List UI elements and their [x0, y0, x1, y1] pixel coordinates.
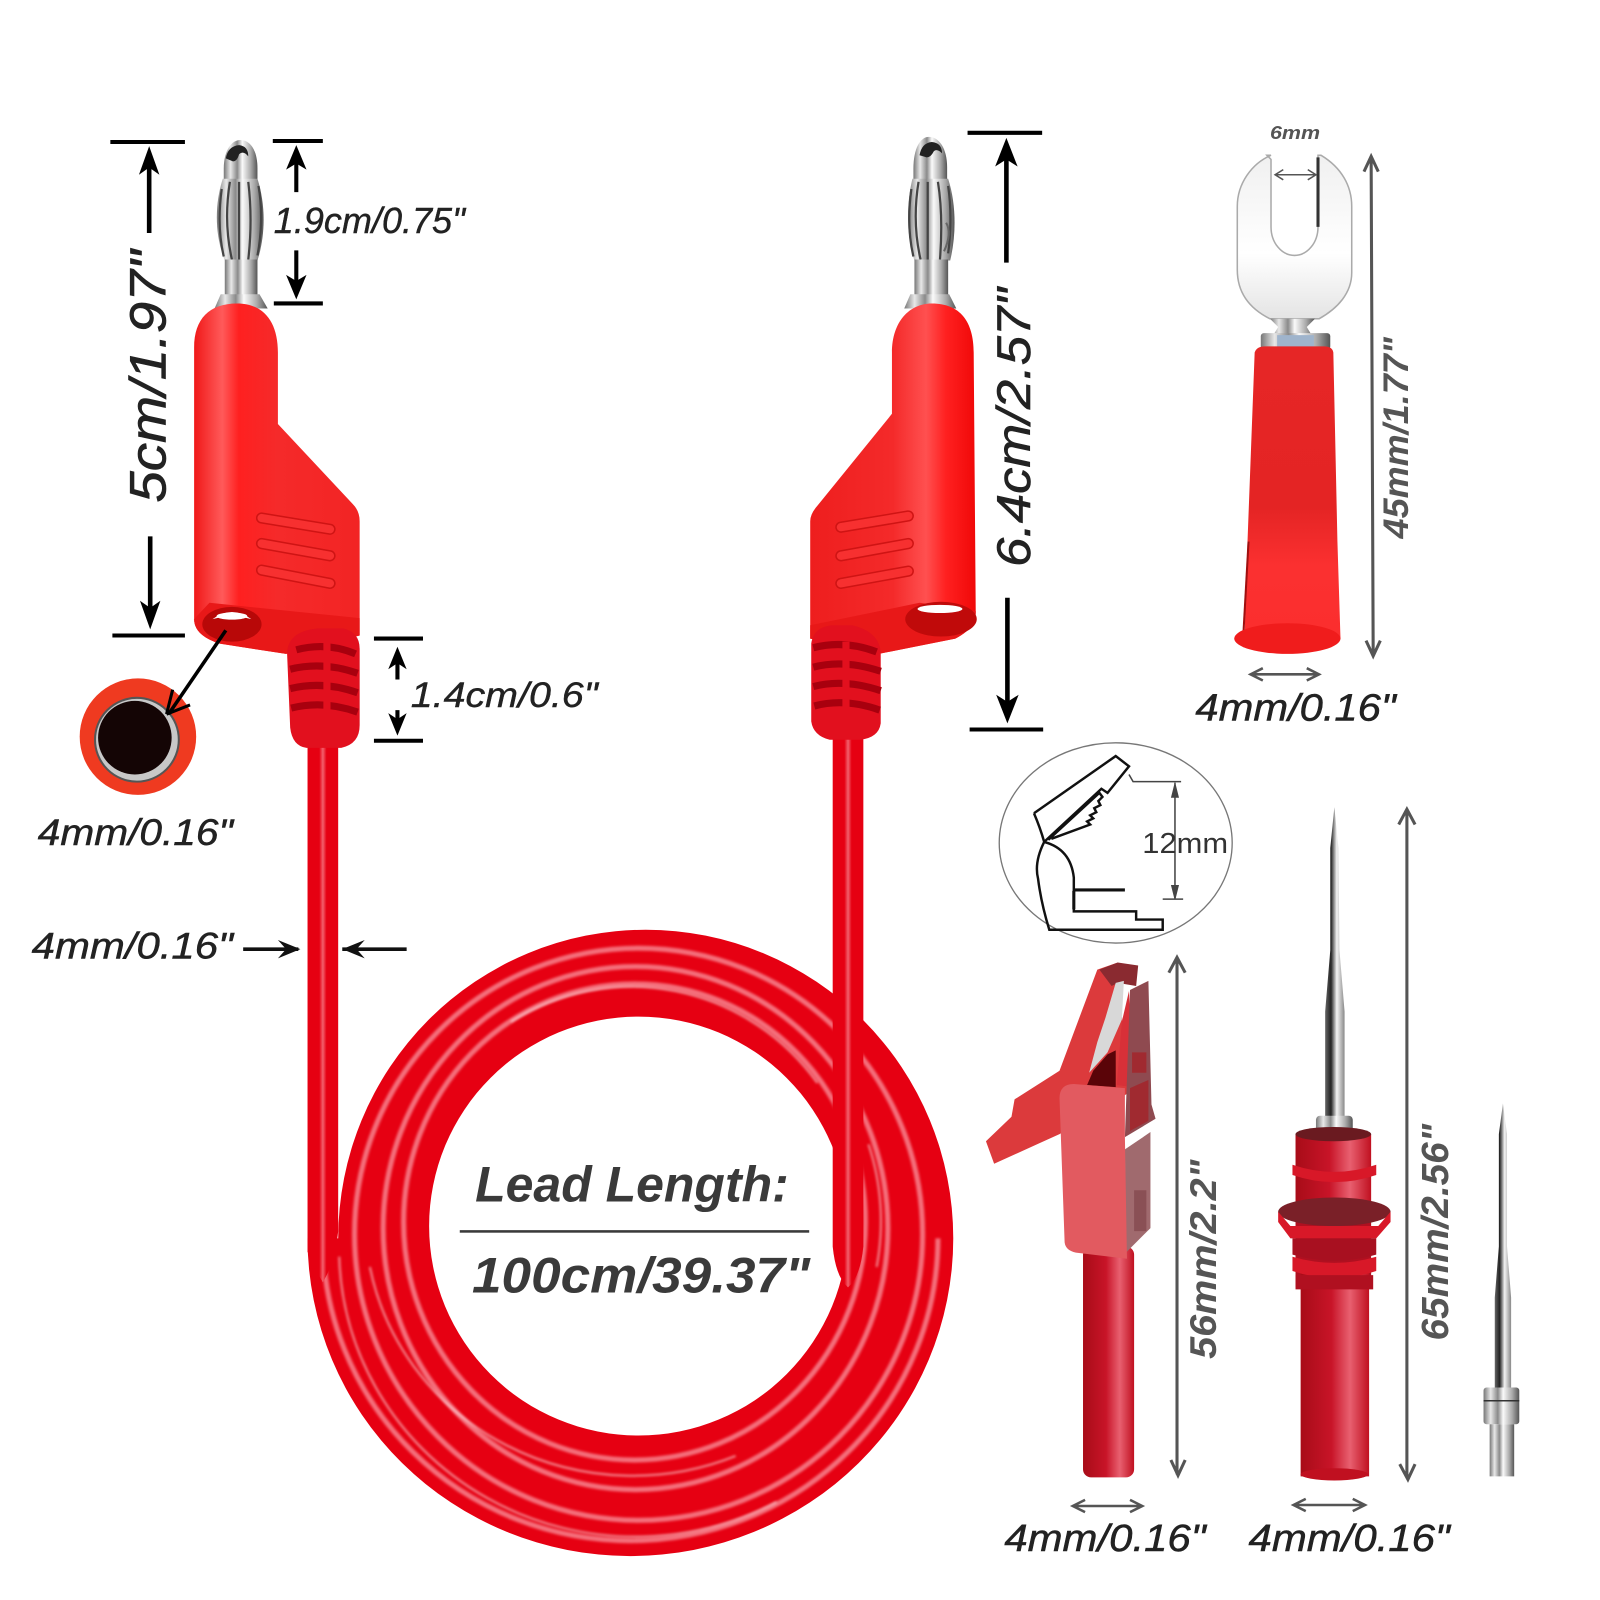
spade fork [1237, 155, 1352, 319]
right plug body [810, 303, 976, 654]
spare needle [1484, 1103, 1519, 1476]
jaw opening detail [999, 743, 1232, 943]
6mm gap arrow: 6mm [1270, 122, 1320, 143]
dimension: clip 56mm/2.2: 56mm/2.2" [1183, 1159, 1224, 1359]
right wire [833, 736, 863, 1287]
socket detail icon [80, 678, 196, 795]
dimension: wire 4mm/0.16: 4mm/0.16" [32, 925, 235, 966]
left plug body [194, 303, 360, 654]
clip stem [1083, 1246, 1134, 1477]
clip side panel [1125, 981, 1156, 1137]
left plug grip ridges [262, 518, 330, 583]
right plug grip ridges [841, 516, 908, 583]
jaw outline [1034, 756, 1163, 930]
dimension: 6.4cm/2.57: 6.4cm/2.57" [987, 286, 1040, 567]
dimension: clip 4mm/0.16: 4mm/0.16" [1004, 1518, 1207, 1560]
left banana plug [194, 140, 360, 748]
dimension: probe 65mm/2.56 [1399, 809, 1457, 1479]
dimension: wire 4mm/0.16 [32, 925, 407, 966]
left wire [308, 741, 338, 1282]
dimension: 45mm/1.77: 45mm/1.77" [1378, 337, 1416, 539]
clip front block [1060, 1084, 1127, 1259]
spade red sleeve [1244, 346, 1340, 639]
right banana plug [810, 137, 977, 740]
dimension: 5cm/1.97: 5cm/1.97" [120, 247, 177, 503]
piercing probe [1278, 807, 1391, 1480]
jaw opening detail: 12mm [1142, 828, 1228, 860]
left pin [215, 140, 268, 309]
spade terminal [1234, 155, 1352, 654]
right pin [904, 137, 956, 309]
lead length label [460, 1157, 812, 1303]
lead wire coil [308, 930, 953, 1556]
label: socket 4mm/0.16: 4mm/0.16" [38, 812, 235, 853]
dimension: 1.9cm/0.75 [273, 141, 467, 303]
dimension: spade 4mm/0.16: 4mm/0.16" [1195, 687, 1397, 729]
lead length label: 100cm/39.37" [472, 1247, 812, 1303]
dimension: probe 4mm/0.16: 4mm/0.16" [1249, 1518, 1452, 1560]
dimension: spade 4mm/0.16 [1195, 668, 1397, 729]
clip rear lever [986, 962, 1128, 1164]
dimension: probe 65mm/2.56: 65mm/2.56" [1415, 1123, 1457, 1340]
dimension: 6.4cm/2.57 [968, 133, 1043, 730]
arrow to socket detail [167, 630, 226, 714]
dimension: clip 56mm/2.2 [1169, 957, 1224, 1475]
left strain relief [287, 628, 360, 748]
dimension: 45mm/1.77 [1364, 156, 1416, 656]
dimension: clip 4mm/0.16 [1004, 1500, 1207, 1560]
dimension: 1.9cm/0.75: 1.9cm/0.75" [274, 201, 467, 241]
dimension: 1.4cm/0.6 [374, 639, 600, 741]
dimension: probe 4mm/0.16 [1249, 1499, 1452, 1560]
6mm gap arrow [1270, 122, 1320, 180]
left plug socket [202, 607, 262, 642]
dimension: 1.4cm/0.6: 1.4cm/0.6" [411, 677, 600, 715]
12mm height marker [1129, 774, 1183, 899]
probe collar [1316, 1116, 1353, 1134]
right strain relief [811, 625, 881, 740]
probe needle [1325, 807, 1345, 1119]
spade collar [1270, 319, 1315, 337]
right plug socket [905, 602, 977, 637]
lead length label: Lead Length: [475, 1157, 789, 1213]
clip teeth [1089, 981, 1124, 1073]
dimension: 5cm/1.97 [110, 142, 185, 636]
probe flange [1278, 1197, 1391, 1226]
probe red body [1296, 1206, 1371, 1287]
alligator clip [986, 962, 1156, 1477]
